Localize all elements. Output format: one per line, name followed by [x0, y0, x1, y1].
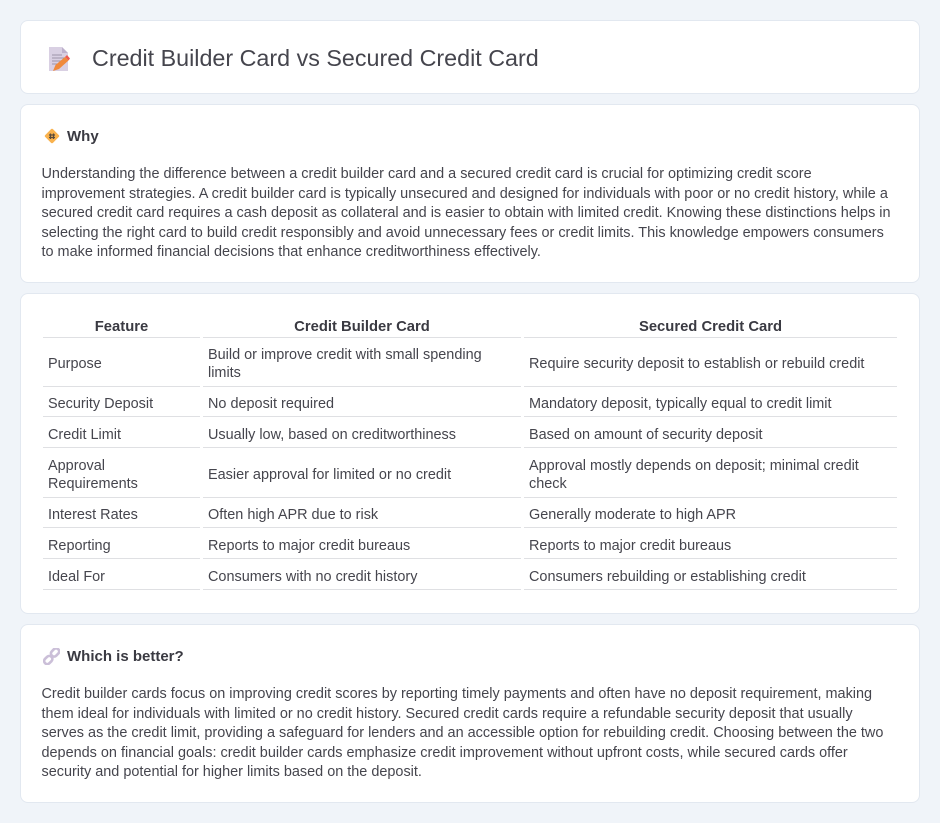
row: interest rates: Often high APR due to risk — [208, 507, 378, 523]
text block: why explanation: Understanding the difference between a credit builder card and a secured credit card is crucial for optimizing credit score — [42, 166, 812, 182]
icon: document with pencil — [49, 47, 70, 71]
row: interest rates — [43, 507, 897, 528]
row: approval requirements — [43, 458, 897, 498]
table header row: Secured Credit Card — [639, 319, 782, 335]
row: credit limit: Credit Limit — [48, 427, 121, 443]
row: purpose: Purpose — [48, 356, 102, 372]
icon: chain link — [43, 648, 60, 665]
row: reporting — [43, 538, 897, 559]
row: purpose: Build or improve credit with small spending — [208, 347, 482, 363]
row: ideal for — [43, 569, 897, 590]
row: security deposit: No deposit required — [208, 396, 334, 412]
row: interest rates: Interest Rates — [48, 507, 138, 523]
text block: why explanation — [42, 166, 891, 260]
text block: comparison conclusion: them ideal for individuals with limited or no credit history. Secured credit cards require a refundable security deposit that usually — [42, 706, 853, 722]
row: security deposit: Mandatory deposit, typically equal to credit limit — [529, 396, 832, 412]
row: purpose: limits — [208, 365, 241, 381]
heading: which is better: Which is better? — [67, 648, 184, 664]
row: ideal for: Consumers rebuilding or establishing credit — [529, 569, 806, 585]
heading: why: Why — [67, 128, 99, 144]
row: ideal for: Consumers with no credit history — [208, 569, 417, 585]
row: approval requirements: check — [529, 476, 567, 492]
text block: comparison conclusion: depends on financial goals: credit builder cards emphasize credit improvement without upfront costs, while secured cards offer — [42, 745, 848, 761]
icon: warning diamond — [44, 128, 60, 144]
row: approval requirements: Easier approval for limited or no credit — [208, 467, 451, 483]
row: reporting: Reports to major credit bureaus — [208, 538, 410, 554]
row: approval requirements: Approval — [48, 458, 105, 474]
row: approval requirements: Approval mostly depends on deposit; minimal credit — [529, 458, 859, 474]
table header row: Credit Builder Card — [294, 319, 430, 335]
title: Credit Builder Card vs Secured Credit Card — [92, 45, 539, 71]
text block: why explanation: secured credit card requires a cash deposit as collateral and is easier to obtain with limited credit. Knowing these distinctions helps in — [42, 205, 891, 221]
row: security deposit — [43, 396, 897, 417]
panel: comparison table — [20, 293, 920, 614]
row: ideal for: Ideal For — [48, 569, 105, 585]
text block: comparison conclusion: serves as the credit limit, providing a safeguard for lenders and an accessible option for rebuilding credit. Choosing between the two — [42, 725, 883, 741]
panel: header — [20, 20, 920, 94]
text block: comparison conclusion: Credit builder cards focus on improving credit scores by reporting timely payments and often have no deposit requirement, making — [42, 686, 872, 702]
text block: why explanation: selecting the right card to build credit responsibly and avoid unnecessary fees or credit limits. This knowledge empowers consumers — [42, 225, 884, 241]
panel: which is better — [20, 624, 920, 803]
row: approval requirements: Requirements — [48, 476, 138, 492]
row: purpose — [43, 347, 897, 387]
row: security deposit: Security Deposit — [48, 396, 153, 412]
row: reporting: Reporting — [48, 538, 111, 554]
row: interest rates: Generally moderate to high APR — [529, 507, 736, 523]
panel: why — [20, 104, 920, 283]
row: purpose: Require security deposit to establish or rebuild credit — [529, 356, 864, 372]
table header row: Feature — [95, 319, 148, 335]
row: credit limit — [43, 427, 897, 448]
text block: why explanation: improvement strategies. A credit builder card is typically unsecured and designed for individuals with poor or no credit history, while a — [42, 186, 888, 202]
row: credit limit: Usually low, based on creditworthiness — [208, 427, 456, 443]
row: credit limit: Based on amount of security deposit — [529, 427, 763, 443]
text block: why explanation: to make informed financial decisions that enhance creditworthiness effectively. — [42, 244, 541, 260]
text block: comparison conclusion: security and potential for higher limits based on the deposit. — [42, 764, 422, 780]
row: reporting: Reports to major credit bureaus — [529, 538, 731, 554]
text block: comparison conclusion — [42, 686, 883, 780]
table header row — [43, 319, 897, 338]
